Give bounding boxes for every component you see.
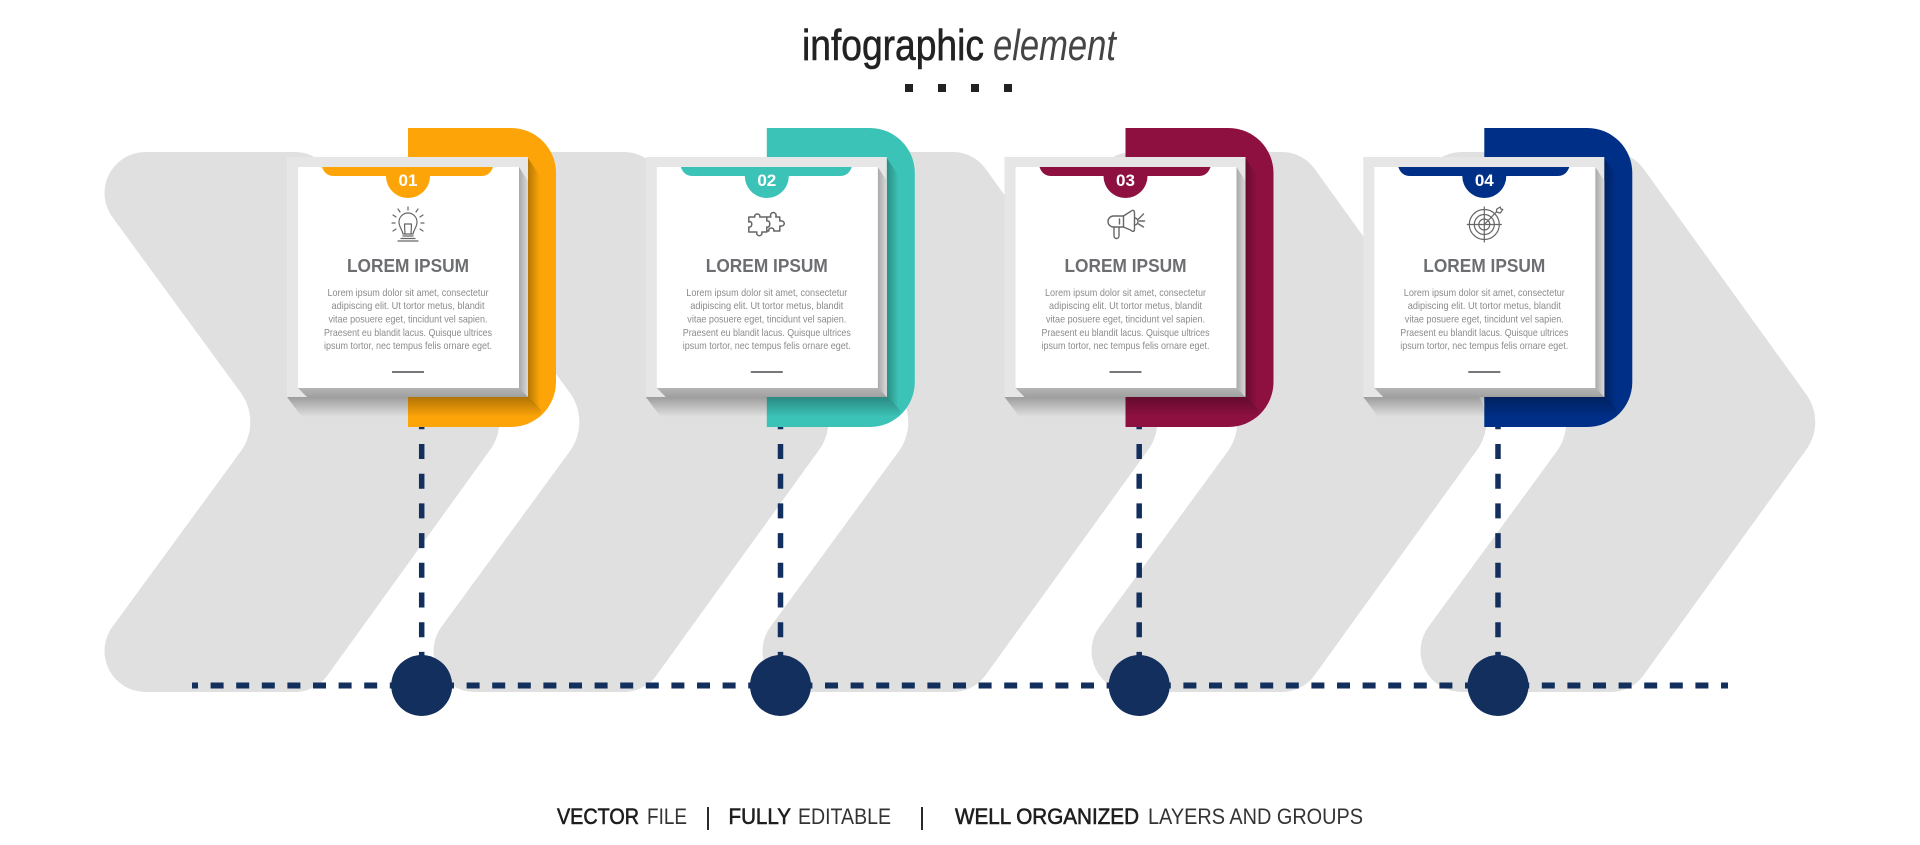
body text: adipiscing elit. Ut tortor metus, blandit (1408, 300, 1561, 312)
body text: Lorem ipsum dolor sit amet, consectetur (686, 287, 848, 299)
footer tagline: FULLY (728, 804, 791, 829)
navy bracket (1484, 128, 1632, 427)
card face (1374, 167, 1595, 388)
body text: ipsum tortor, nec tempus felis ornare eget. (683, 340, 851, 352)
body text: Lorem ipsum dolor sit amet, consectetur (1404, 287, 1565, 299)
card shadow (287, 158, 541, 417)
card frame (646, 157, 887, 397)
icon: puzzle (749, 212, 784, 236)
number: 02 (757, 171, 776, 190)
card shadow (646, 158, 900, 417)
title (802, 21, 1117, 70)
panel: step 04 (1363, 128, 1632, 427)
heading: LOREM IPSUM (1423, 255, 1545, 276)
card frame (1363, 157, 1604, 397)
card frame (287, 157, 528, 397)
footer tagline: VECTOR (557, 804, 639, 829)
body text (1400, 287, 1568, 352)
background chevrons (104, 152, 1815, 692)
number tab (1398, 167, 1569, 198)
body text: adipiscing elit. Ut tortor metus, blandit (690, 300, 843, 312)
body text: Lorem ipsum dolor sit amet, consectetur (1045, 287, 1206, 299)
title: element (993, 21, 1117, 70)
body text: Lorem ipsum dolor sit amet, consectetur (328, 287, 489, 299)
short rule (751, 371, 783, 373)
body text: adipiscing elit. Ut tortor metus, blandit (332, 300, 485, 312)
body text: vitae posuere eget, tincidunt vel sapien. (1405, 314, 1564, 326)
footer tagline (557, 804, 1363, 830)
maroon bracket (1126, 128, 1274, 427)
icon: megaphone (1108, 210, 1144, 238)
card shadow (1004, 158, 1258, 417)
body text (1042, 287, 1210, 352)
icon: target (1467, 207, 1503, 242)
number: 03 (1116, 171, 1135, 190)
card inner shadow (657, 167, 887, 397)
icon: light bulb (392, 207, 424, 241)
body text: ipsum tortor, nec tempus felis ornare eget. (324, 340, 492, 352)
body text (683, 287, 851, 352)
title: infographic (802, 21, 984, 70)
heading: LOREM IPSUM (347, 255, 469, 276)
card face (298, 167, 519, 388)
vertical dashed connectors (422, 414, 1498, 665)
footer tagline: WELL ORGANIZED (955, 804, 1139, 829)
number tab (1040, 167, 1210, 198)
panel: step 01 (287, 128, 556, 427)
title dots (905, 84, 1012, 92)
body text: vitae posuere eget, tincidunt vel sapien. (328, 314, 488, 326)
footer tagline: LAYERS AND GROUPS (1148, 804, 1363, 829)
number tab (681, 167, 852, 198)
card inner shadow (1016, 167, 1246, 397)
short rule (392, 371, 424, 373)
body text: ipsum tortor, nec tempus felis ornare eget. (1042, 340, 1210, 352)
body text: vitae posuere eget, tincidunt vel sapien. (1046, 314, 1205, 326)
card inner shadow (298, 167, 528, 397)
number tab (322, 167, 493, 198)
card face (1016, 167, 1236, 388)
body text: ipsum tortor, nec tempus felis ornare eget. (1400, 340, 1568, 352)
timeline nodes (391, 655, 1529, 716)
orange bracket (408, 128, 556, 427)
body text (324, 287, 492, 352)
teal bracket (767, 128, 915, 427)
card inner shadow (1374, 167, 1604, 397)
body text: Praesent eu blandit lacus. Quisque ultrices (683, 327, 851, 339)
number: 04 (1475, 171, 1494, 190)
panel: step 03 (1004, 128, 1274, 427)
body text: vitae posuere eget, tincidunt vel sapien. (687, 314, 846, 326)
footer tagline: EDITABLE (798, 804, 891, 829)
heading: LOREM IPSUM (1064, 255, 1186, 276)
heading: LOREM IPSUM (706, 255, 828, 276)
card face (657, 167, 878, 388)
body text: Praesent eu blandit lacus. Quisque ultrices (1042, 327, 1210, 339)
body text: Praesent eu blandit lacus. Quisque ultrices (324, 327, 492, 339)
panel: step 02 (646, 128, 915, 427)
body text: adipiscing elit. Ut tortor metus, blandit (1049, 300, 1202, 312)
short rule (1110, 371, 1142, 373)
body text: Praesent eu blandit lacus. Quisque ultrices (1400, 327, 1568, 339)
card frame (1004, 157, 1246, 397)
number: 01 (399, 171, 417, 190)
card shadow (1363, 158, 1617, 417)
footer tagline: FILE (647, 804, 687, 829)
short rule (1468, 371, 1500, 373)
horizontal dashed timeline (192, 682, 1728, 688)
